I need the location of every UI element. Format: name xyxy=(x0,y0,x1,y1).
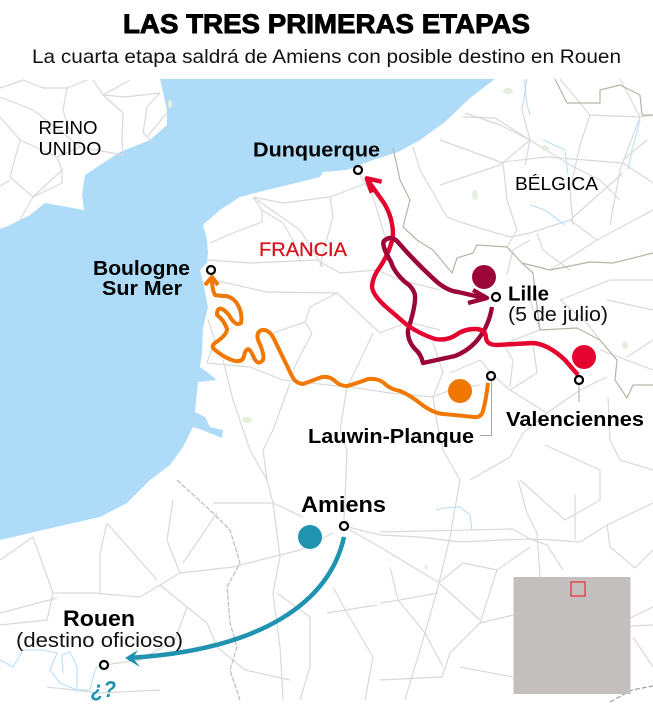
label: Lille date: (5 de julio) xyxy=(508,304,608,326)
route: stage 4 Amiens to Rouen (blue) xyxy=(125,537,344,667)
map: green patches xyxy=(168,88,628,570)
label: question marks: ¿? xyxy=(91,676,116,702)
subtitle: La cuarta etapa saldrá de Amiens con posible destino en Rouen xyxy=(32,46,621,68)
label: Dunquerque: Dunquerque xyxy=(253,138,380,162)
stage dot: orange xyxy=(448,379,472,403)
locator inset xyxy=(514,577,630,694)
city markers xyxy=(100,166,583,669)
stage dot: blue xyxy=(298,525,322,549)
label: Boulogne Sur Mer: Sur Mer xyxy=(102,278,182,300)
title: LAS TRES PRIMERAS ETAPAS xyxy=(123,9,530,39)
label: Lauwin-Planque: Lauwin-Planque xyxy=(308,425,474,448)
label: Reino Unido: REINO xyxy=(38,117,98,138)
route: stage 3 Lauwin-Planque to Boulogne (orange) xyxy=(205,277,488,417)
stage dot: maroon xyxy=(472,265,496,289)
label: Francia: FRANCIA xyxy=(259,240,347,261)
label: destino oficioso: (destino oficioso) xyxy=(16,630,183,652)
route: stage 1 Lille to Lille area (maroon) xyxy=(383,238,492,363)
label: Boulogne Sur Mer: Boulogne xyxy=(93,258,190,280)
re-draw of maroon crossing over red xyxy=(383,238,437,282)
label: Lille: Lille xyxy=(508,282,549,306)
leader lines xyxy=(480,381,579,436)
stage dot: red xyxy=(572,345,596,369)
label: Reino Unido xyxy=(38,117,102,159)
map: sea xyxy=(0,79,495,540)
label: Belgica: BÉLGICA xyxy=(515,173,599,194)
label: Reino Unido: UNIDO xyxy=(38,138,102,159)
route: stage 2 Valenciennes to Dunquerque (red) xyxy=(367,178,578,375)
label: Amiens: Amiens xyxy=(301,492,386,517)
map: national borders xyxy=(177,79,653,702)
label: Rouen: Rouen xyxy=(63,606,135,631)
label: Boulogne Sur Mer xyxy=(93,258,190,300)
bottom white margin xyxy=(0,702,653,709)
label: Valenciennes: Valenciennes xyxy=(506,408,644,431)
